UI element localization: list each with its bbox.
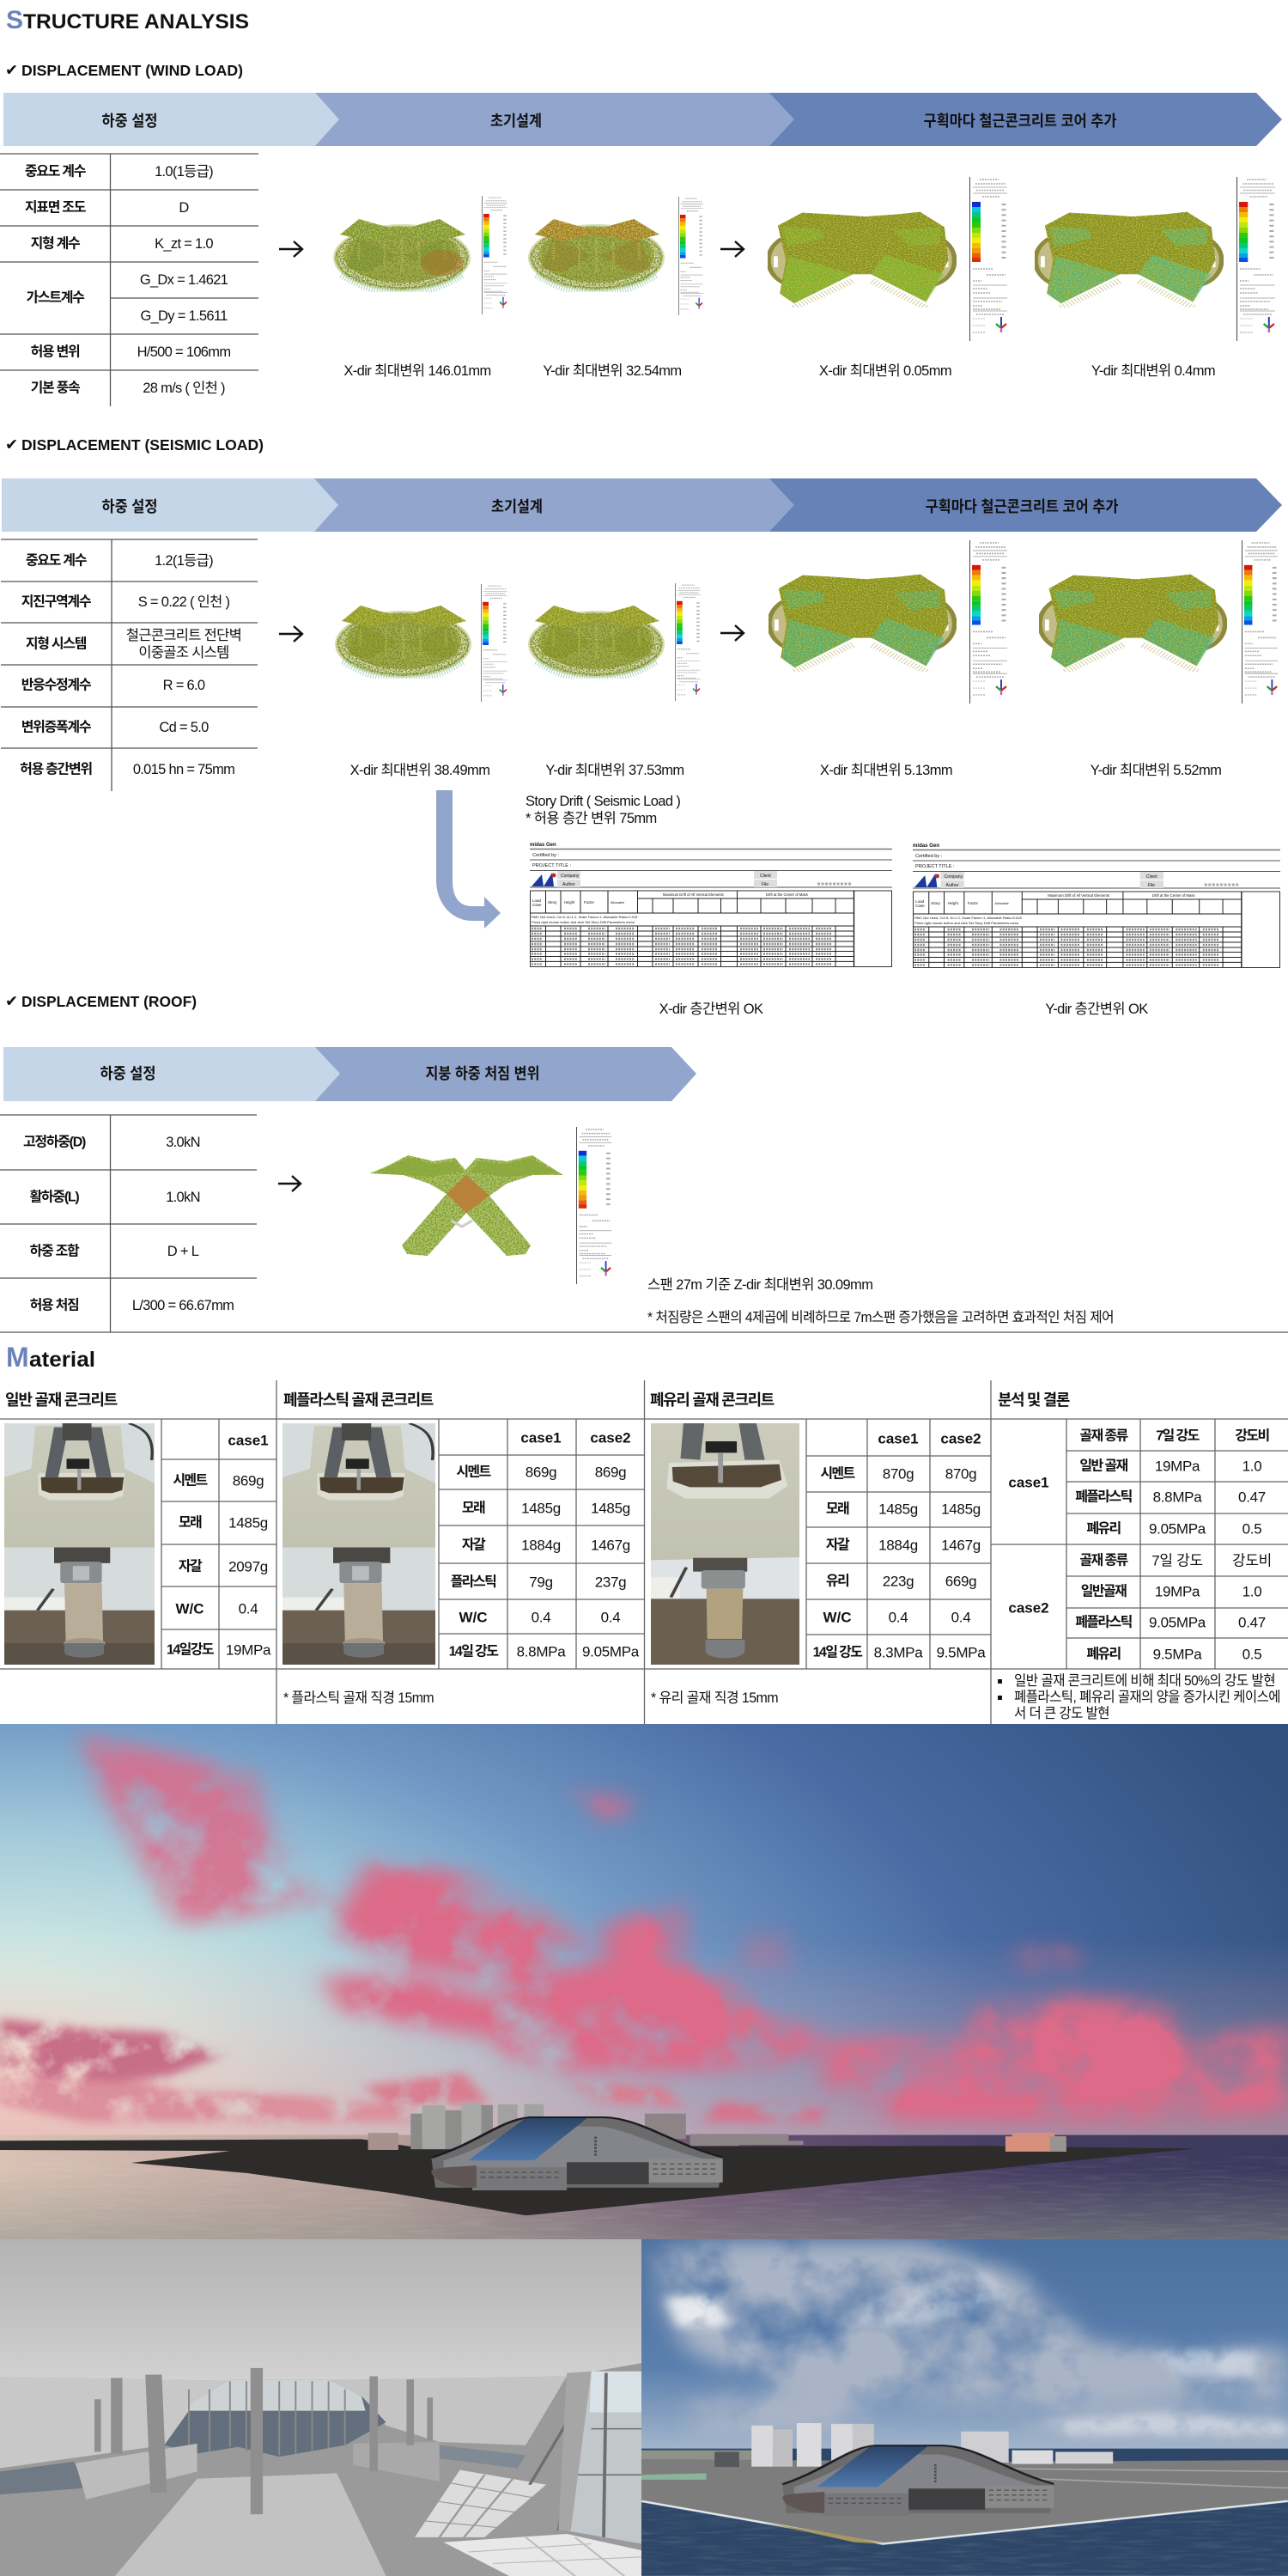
caption: story drift x: X-dir 층간변위 OK [659, 1001, 763, 1017]
heading: analysis: 분석 및 결론 [998, 1392, 1070, 1409]
table: plastic mix [439, 1419, 644, 1669]
table: plain mix: 시멘트 [173, 1472, 209, 1488]
image: sunset render [0, 1724, 1288, 2239]
table: plastic mix: 869g [595, 1464, 626, 1481]
table: story drift x report [530, 842, 892, 967]
table: strength comparison: 1.0 [1242, 1459, 1261, 1474]
arrow band: seismic stages: 초기설계 [491, 498, 543, 515]
table: wind load settings: 허용 변위 [31, 344, 80, 359]
table: seismic settings: R = 6.0 [163, 678, 205, 693]
table: plastic mix: 237g [595, 1574, 626, 1591]
table: wind load settings: H/500 = 106mm [137, 344, 230, 360]
table: wind load settings: G_Dy = 1.5611 [140, 308, 228, 324]
legend: wind x initial [482, 196, 507, 314]
table: strength comparison: 0.5 [1242, 1520, 1261, 1538]
table: strength comparison: 폐플라스틱 [1075, 1489, 1132, 1505]
legend: wind y core [1237, 177, 1275, 341]
model: wind y core [1036, 212, 1222, 308]
arrow: to core design [720, 241, 744, 257]
table: strength comparison: 19MPa [1155, 1459, 1200, 1474]
table: seismic settings: 0.015 hn = 75mm [133, 762, 234, 777]
text: roof result: 스팬 27m 기준 Z-dir 최대변위 30.09mm [647, 1276, 872, 1293]
image: daytime render [641, 2239, 1288, 2576]
table: roof settings: 하중 조합 [30, 1244, 80, 1259]
table: strength comparison: 폐플라스틱 [1075, 1615, 1132, 1630]
table: glass mix: 870g [945, 1465, 976, 1483]
table: plastic mix: W/C [459, 1610, 488, 1625]
table: glass mix [806, 1419, 991, 1669]
table: plastic mix: 79g [529, 1574, 553, 1591]
legend: seismic x initial [481, 584, 507, 702]
table: seismic settings: 변위증폭계수 [21, 720, 92, 735]
table: strength comparison: 강도비 [1232, 1553, 1272, 1568]
table: roof settings: 고정하중(D) [23, 1134, 86, 1149]
table: wind load settings: 가스트계수 [26, 290, 85, 306]
legend: seismic x core [970, 540, 1007, 703]
table: plain mix: 2097g [228, 1558, 268, 1575]
table: strength comparison: case2 [1008, 1599, 1049, 1617]
table: strength comparison: 19MPa [1155, 1584, 1200, 1599]
heading: displacement roof: DISPLACEMENT (ROOF) [21, 993, 197, 1010]
caption: seismic x initial: X-dir 최대변위 38.49mm [350, 762, 489, 778]
table: strength comparison: 7일 강도 [1151, 1553, 1203, 1568]
table: glass mix: 0.4 [951, 1610, 970, 1625]
table: strength comparison: case1 [1008, 1474, 1049, 1491]
arrow: to initial design [279, 241, 302, 257]
table: strength comparison: 8.8MPa [1153, 1489, 1202, 1505]
table: wind load settings [0, 154, 258, 406]
title: material: aterial [29, 1348, 95, 1372]
table: glass mix: W/C [823, 1610, 852, 1625]
table: strength comparison: 강도비 [1235, 1428, 1269, 1443]
table: roof settings: 허용 처짐 [30, 1297, 78, 1312]
panel: material grid [0, 1380, 1288, 1724]
panel: glass aggregate concrete [650, 1392, 991, 1706]
arrow: to story drift [436, 790, 501, 929]
arrow band: seismic stages: 구획마다 철근콘크리트 코어 추가 [926, 498, 1119, 515]
table: strength comparison: 폐유리 [1086, 1520, 1121, 1536]
table: strength comparison: 9.05MPa [1149, 1615, 1206, 1630]
model: seismic y initial [528, 606, 665, 679]
arrow band: roof stages [3, 1047, 696, 1101]
table: seismic settings [1, 539, 258, 791]
title: material [6, 1342, 95, 1373]
table: plastic mix: 0.4 [532, 1610, 550, 1625]
table: plain mix: 869g [233, 1472, 264, 1489]
arrow band: wind load stages [3, 93, 1282, 146]
table: seismic settings: 지형 시스템 [26, 636, 87, 651]
table: plastic mix: 1467g [591, 1538, 630, 1553]
title: material: M [6, 1342, 29, 1373]
photo: plain specimen [4, 1423, 155, 1665]
table: seismic settings: 지진구역계수 [21, 594, 92, 610]
table: glass mix: 1467g [941, 1538, 981, 1553]
table: plain mix: 0.4 [239, 1601, 258, 1617]
caption: seismic y core: Y-dir 최대변위 5.52mm [1091, 762, 1221, 778]
photo: plastic specimen [283, 1423, 435, 1665]
model: roof deflection [370, 1155, 563, 1256]
table: plain mix: 19MPa [226, 1642, 271, 1658]
table: wind load settings: 1.0(1등급) [155, 164, 213, 180]
table: wind load settings: 기본 풍속 [31, 380, 81, 395]
table: plain mix: W/C [175, 1601, 204, 1617]
table: roof settings: D + L [167, 1244, 199, 1259]
table: roof settings: L/300 = 66.67mm [132, 1298, 234, 1313]
heading: displacement roof: ✔ [5, 993, 18, 1010]
table: glass mix: 1485g [878, 1501, 918, 1517]
arrow band: wind load stages: 구획마다 철근콘크리트 코어 추가 [924, 113, 1117, 130]
arrow: to roof result [278, 1176, 301, 1191]
legend: seismic y core [1242, 540, 1278, 703]
table: wind load settings: 28 m/s ( 인천 ) [143, 380, 225, 396]
table: plain mix: case1 [228, 1433, 269, 1448]
caption: seismic y initial: Y-dir 최대변위 37.53mm [545, 762, 684, 778]
model: seismic x core [769, 575, 955, 672]
table: seismic settings: 허용 층간변위 [20, 761, 92, 776]
table: strength comparison: 골재 종류 [1079, 1428, 1129, 1443]
arrow band: wind load stages: 하중 설정 [101, 113, 158, 130]
table: plastic mix: 8.8MPa [517, 1644, 566, 1659]
legend: seismic y initial [675, 583, 701, 701]
arrow band: roof stages: 지붕 하중 처짐 변위 [426, 1065, 539, 1082]
table: glass mix: 유리 [826, 1574, 848, 1589]
table: plastic mix: 플라스틱 [451, 1574, 495, 1589]
table: strength comparison: 골재 종류 [1079, 1553, 1129, 1568]
model: seismic y core [1040, 575, 1225, 672]
title: structure analysis: TRUCTURE ANALYSIS [23, 10, 249, 33]
table: seismic settings: 이중골조 시스템 [138, 644, 229, 661]
table: plastic mix: 9.05MPa [582, 1644, 640, 1659]
note: glass aggregate size: * 유리 골재 직경 15mm [651, 1690, 778, 1706]
table: plain mix [161, 1419, 276, 1669]
text: story drift: * 허용 층간 변위 75mm [526, 810, 657, 826]
table: strength comparison: 0.47 [1238, 1615, 1266, 1630]
table: plastic mix: 시멘트 [456, 1464, 492, 1479]
table: glass mix: case1 [878, 1431, 919, 1446]
panel: wind load [0, 62, 1282, 406]
arrow band: seismic stages: 하중 설정 [101, 498, 158, 515]
table: glass mix: 870g [883, 1465, 914, 1483]
panel: roof [0, 993, 1114, 1332]
caption: wind x core: X-dir 최대변위 0.05mm [819, 362, 951, 379]
text: story drift [526, 794, 680, 826]
table: strength comparison: 일반 골재 [1079, 1459, 1128, 1474]
heading: displacement wind load: DISPLACEMENT (WIND LOAD) [21, 62, 243, 79]
table: strength comparison: 0.47 [1238, 1489, 1266, 1505]
table: plastic mix: case1 [520, 1429, 562, 1446]
table: glass mix: 0.4 [889, 1610, 908, 1625]
table: plastic mix: 모래 [462, 1500, 485, 1515]
text: story drift: Story Drift ( Seismic Load ) [526, 794, 680, 809]
table: glass mix: 1485g [941, 1501, 981, 1517]
table: plastic mix: 869g [526, 1464, 556, 1481]
table: seismic settings: Cd = 5.0 [159, 720, 209, 735]
caption: wind x initial: X-dir 최대변위 146.01mm [343, 362, 491, 379]
table: seismic settings: 철근콘크리트 전단벽 [126, 627, 241, 643]
table: glass mix: 9.5MPa [937, 1644, 986, 1661]
text: roof note: * 처짐량은 스팬의 4제곱에 비례하므로 7m스팬 증가했음을 고려하면 효과적인 처짐 제어 [647, 1309, 1114, 1325]
text: conclusion bullets: 일반 골재 콘크리트에 비해 최대 50%의 강도 발현 [1014, 1672, 1275, 1689]
legend: roof deflection [576, 1127, 611, 1284]
table: glass mix: 669g [945, 1574, 976, 1589]
heading: plain aggregate: 일반 골재 콘크리트 [5, 1392, 118, 1409]
table: strength comparison: 9.05MPa [1149, 1520, 1206, 1538]
table: roof settings: 1.0kN [166, 1190, 200, 1205]
table: strength comparison: 0.5 [1242, 1646, 1261, 1663]
table: plain mix: 14일강도 [167, 1642, 215, 1658]
table: wind load settings: K_zt = 1.0 [155, 236, 213, 252]
title: structure analysis: S [6, 6, 23, 34]
table: plain mix: 모래 [179, 1515, 202, 1531]
table: plastic mix: 0.4 [601, 1610, 620, 1625]
text: conclusion bullets [998, 1672, 1280, 1721]
caption: wind y initial: Y-dir 최대변위 32.54mm [543, 362, 682, 379]
table: story drift y report [913, 843, 1280, 968]
table: strength comparison: 1.0 [1242, 1584, 1261, 1599]
arrow band: wind load stages: 초기설계 [490, 113, 542, 130]
table: roof settings: 활하중(L) [30, 1189, 79, 1204]
arrow band: roof stages: 하중 설정 [100, 1065, 156, 1082]
table: strength comparison: 9.5MPa [1153, 1646, 1202, 1663]
table: plastic mix: 자갈 [462, 1538, 486, 1553]
table: strength comparison: 7일 강도 [1156, 1428, 1200, 1443]
image: interior render [0, 2239, 641, 2576]
legend: wind y initial [678, 197, 703, 315]
table: glass mix: 14일 강도 [813, 1644, 863, 1659]
table: wind load settings: 중요도 계수 [25, 163, 87, 179]
panel: plastic aggregate concrete [283, 1392, 644, 1706]
table: glass mix: 1884g [878, 1538, 918, 1553]
text: conclusion bullets: 서 더 큰 강도 발현 [1014, 1705, 1109, 1721]
table: glass mix: 모래 [826, 1501, 849, 1517]
arrow band: seismic stages [2, 478, 1282, 532]
table: plastic mix: 14일 강도 [449, 1644, 499, 1659]
caption: wind y core: Y-dir 최대변위 0.4mm [1091, 362, 1215, 379]
photo: glass specimen [651, 1423, 799, 1665]
table: strength comparison: 일반골재 [1081, 1584, 1127, 1599]
table: glass mix: case2 [940, 1431, 981, 1446]
legend: wind x core [970, 177, 1007, 341]
heading: displacement seismic load: DISPLACEMENT (SEISMIC LOAD) [21, 436, 264, 454]
table: glass mix: 시멘트 [820, 1465, 856, 1481]
table: plastic mix: 1485g [591, 1500, 630, 1517]
table: plain mix: 1485g [228, 1515, 268, 1531]
heading: displacement seismic load: ✔ [5, 436, 18, 454]
table: wind load settings: 지표면 조도 [25, 199, 87, 215]
caption: story drift y: Y-dir 층간변위 OK [1045, 1001, 1148, 1017]
heading: glass aggregate: 폐유리 골재 콘크리트 [650, 1392, 775, 1409]
heading: displacement wind load: ✔ [5, 62, 18, 79]
model: wind x initial [333, 219, 471, 293]
table: roof settings: 3.0kN [166, 1135, 200, 1150]
table: glass mix: 자갈 [826, 1538, 850, 1553]
table: seismic settings: 1.2(1등급) [155, 553, 213, 569]
table: seismic settings: 반응수정계수 [21, 677, 92, 692]
table: plastic mix: 1884g [521, 1538, 561, 1553]
model: wind x core [769, 212, 955, 308]
model: wind y initial [528, 219, 665, 293]
arrow: to seismic initial [279, 626, 302, 642]
table: wind load settings: G_Dx = 1.4621 [140, 272, 228, 288]
table: seismic settings: 중요도 계수 [26, 553, 88, 569]
table: glass mix: 8.3MPa [874, 1644, 923, 1661]
table: plastic mix: case2 [590, 1429, 631, 1446]
table: seismic settings: S = 0.22 ( 인천 ) [138, 594, 229, 610]
arrow: to seismic core [720, 625, 744, 641]
note: plastic aggregate size: * 플라스틱 골재 직경 15mm [283, 1690, 434, 1706]
table: roof settings [0, 1115, 257, 1332]
table: plain mix: 자갈 [179, 1558, 203, 1574]
panel: seismic load [1, 436, 1282, 1017]
table: glass mix: 223g [883, 1574, 914, 1589]
panel: plain aggregate concrete [4, 1392, 276, 1669]
table: strength comparison: 폐유리 [1086, 1646, 1121, 1661]
table: wind load settings: 지형 계수 [31, 235, 81, 251]
table: plastic mix: 1485g [521, 1500, 561, 1517]
model: seismic x initial [335, 606, 471, 679]
table: wind load settings: D [179, 200, 189, 216]
heading: plastic aggregate: 폐플라스틱 골재 콘크리트 [283, 1392, 434, 1409]
table: strength comparison [991, 1419, 1288, 1669]
panel: analysis and conclusion [991, 1392, 1288, 1721]
caption: seismic x core: X-dir 최대변위 5.13mm [820, 762, 952, 778]
